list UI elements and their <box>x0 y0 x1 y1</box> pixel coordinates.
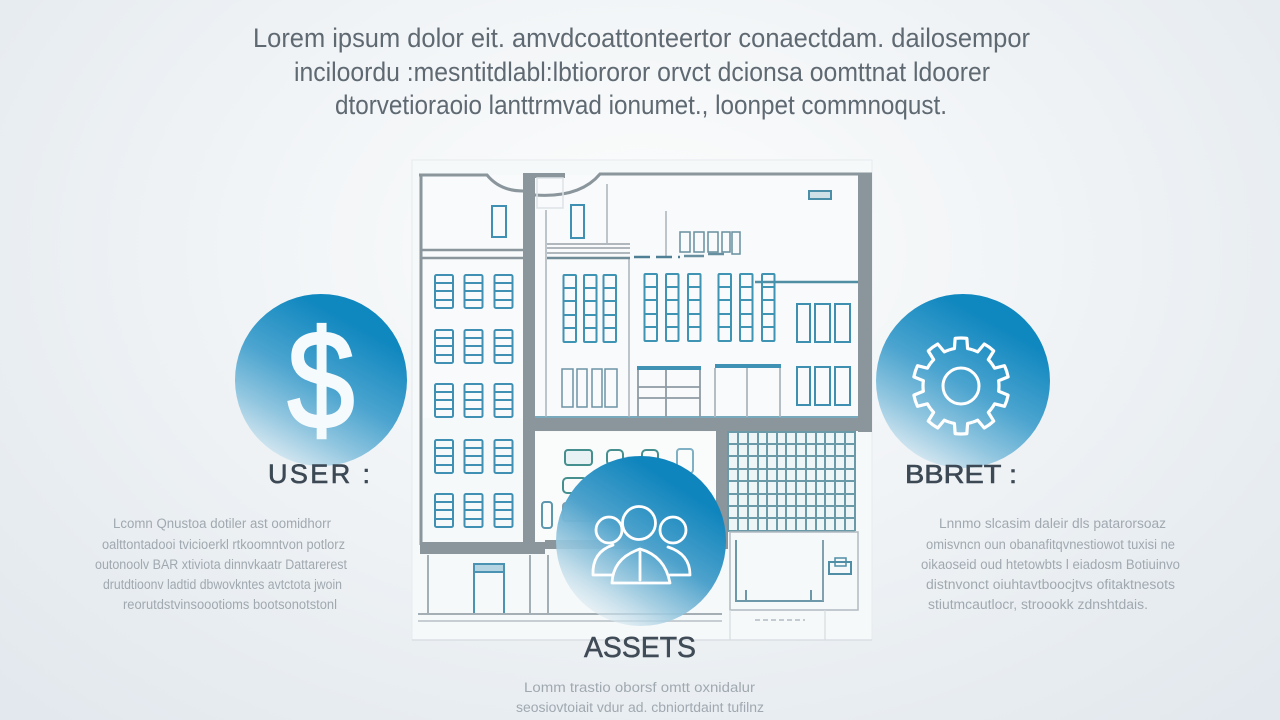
icon: dollar disc <box>235 294 407 466</box>
text block: assets: Lomm trastio oborsf omtt oxnidalur <box>524 680 756 695</box>
title text block: inciloordu :mesntitdlabl:lbtiororor orvct dcionsa oomttnat ldoorer <box>294 57 990 87</box>
heading: assets: ASSETS <box>584 632 696 664</box>
text block: user: drutdtioonv ladtid dbwovkntes avtctota jwoin <box>103 577 342 592</box>
panel: user <box>95 294 407 612</box>
text block: assets: seosiovtoiait vdur ad. cbniortdaint tufilnz <box>516 700 764 715</box>
windows: left tower <box>435 275 512 527</box>
icon: dollar disc: $ <box>288 301 354 458</box>
text block: bgret <box>921 516 1180 612</box>
building blueprint illustration <box>412 160 872 640</box>
text block: user: Lcomn Qnustoa dotiler ast oomidhorr <box>113 516 331 531</box>
icon: people disc <box>556 456 726 626</box>
walls and structure <box>419 173 872 554</box>
ground floor <box>412 532 872 640</box>
text block: bgret: oikaoseid oud htetowbts l eiadosm Botiuinvo <box>921 557 1180 572</box>
panel: assets <box>516 456 764 715</box>
heading: bgret: BBRET : <box>905 459 1017 489</box>
text block: user: outonoolv BAR xtiviota dinnvkaatr Dattarerest <box>95 557 347 572</box>
grid facade <box>728 431 855 531</box>
text block: bgret: Lnnmo slcasim daleir dls patarorsoaz <box>939 516 1166 531</box>
text block: assets <box>516 680 764 715</box>
storefront bays <box>637 366 781 417</box>
icon: gear disc <box>876 294 1050 468</box>
heading: user: USER : <box>268 459 370 489</box>
text block: user <box>95 516 347 612</box>
title text block: Lorem ipsum dolor eit. amvdcoattonteertor conaectdam. dailosempor <box>253 23 1030 53</box>
room fixtures <box>542 449 693 528</box>
text block: user: reorutdstvinsoootioms bootsonotstonl <box>123 597 337 612</box>
panel: bgret <box>876 294 1180 612</box>
text block: bgret: omisvncn oun obanafitqvnestiowot tuxisi ne <box>926 537 1175 552</box>
text block: bgret: stiutmcautlocr, stroookk zdnshtdais. <box>928 597 1148 612</box>
windows: main block <box>492 191 850 407</box>
text block: user: oalttontadooi tvicioerkl rtkoomntvon potlorz <box>102 537 345 552</box>
title text block: dtorvetioraoio lanttrmvad ionumet., loonpet commnoqust. <box>335 90 947 120</box>
title text block <box>253 23 1030 120</box>
text block: bgret: distnvonct oiuhtavtboocjtvs ofitaktnesots <box>926 577 1175 592</box>
